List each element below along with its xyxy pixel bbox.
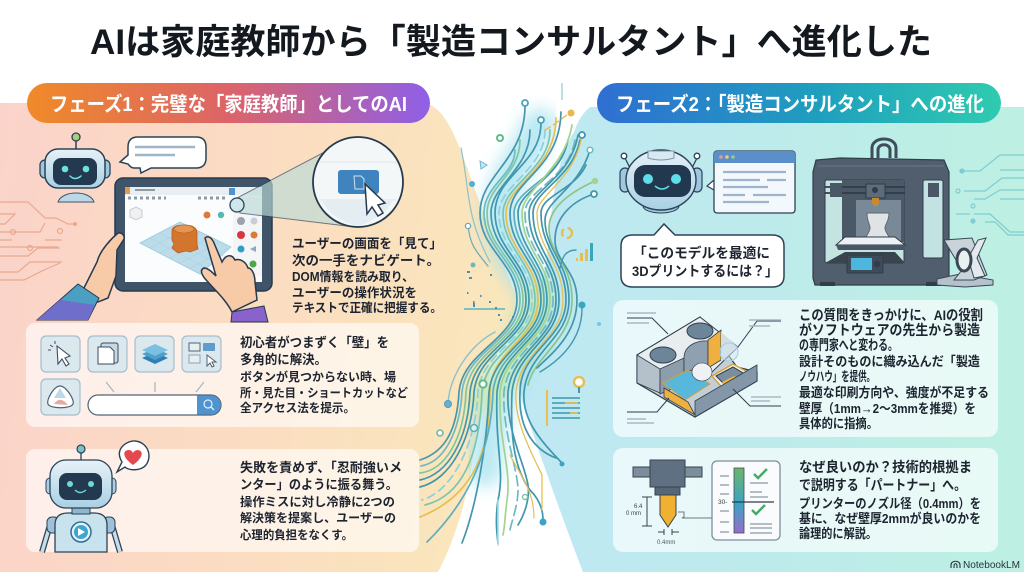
text: mentor: 失敗を責めず、「忍耐強いメ — [240, 460, 402, 475]
text: know-how: 壁厚（1mm→2〜3mmを推奨）を — [799, 401, 976, 416]
text: mentor: 解決策を提案し、ユーザーの — [240, 510, 396, 525]
icon: layers tile — [135, 336, 174, 372]
chart: wall thickness scale: 30- — [718, 499, 727, 506]
illustration: cutaway part — [627, 313, 781, 423]
panel: patient mentor — [26, 441, 419, 552]
text: partner: なぜ良いのか？技術的根拠ま — [799, 459, 972, 475]
text: see the user's screen: DOM情報を読み取り、 — [292, 269, 414, 284]
heading: phase 2 — [597, 83, 1001, 123]
central flowing data streams — [420, 106, 595, 545]
text: know-how: がソフトウェアの先生から製造 — [799, 322, 980, 338]
text: know-how: 具体的に指摘。 — [799, 416, 878, 431]
illustration: nozzle diagram: 6.4 — [634, 504, 643, 510]
title: AIは家庭教師から「製造コンサルタント」へ進化した — [90, 23, 932, 62]
chart: wall thickness scale — [712, 461, 780, 540]
icon: robot with speech bubble (phase 1) — [40, 133, 206, 202]
illustration: tablet with hands — [37, 178, 272, 322]
text: wall solving: 全アクセス法を提示。 — [240, 400, 355, 415]
text: know-how: の専門家へと変わる。 — [799, 337, 898, 353]
text: wall solving: 所・見た目・ショートカットなど — [240, 385, 408, 400]
text: wall solving — [240, 335, 408, 415]
icon: shape tile — [41, 379, 80, 415]
illustration: nozzle diagram — [626, 460, 712, 546]
illustration: nozzle diagram: 0 mm — [626, 511, 641, 517]
panel: wall solving — [26, 323, 419, 427]
right hand — [201, 237, 257, 312]
icon: click tile — [41, 336, 80, 372]
text: partner: 基に、なぜ壁厚2mmが良いのかを — [799, 511, 981, 526]
icon: heart bubble — [117, 441, 149, 472]
text: wall solving: 多角的に解決。 — [240, 352, 327, 367]
panel: technical partner — [613, 448, 998, 552]
icon: layout tile — [182, 336, 221, 372]
heading: phase 1 — [27, 83, 430, 123]
illustration: 3D printer — [813, 139, 949, 286]
illustration: printed part — [937, 238, 993, 287]
text: partner: 論理的に解説。 — [799, 526, 877, 541]
callout: question: 「このモデルを最適に — [633, 245, 770, 261]
callout: question: 3Dプリントするには？」 — [632, 263, 778, 279]
search bar — [88, 382, 221, 415]
text: wall solving: ボタンが見つからない時、場 — [240, 369, 396, 384]
heading: phase 1: フェーズ1：完璧な「家庭教師」としてのAI — [50, 92, 407, 116]
decorative circuit right — [956, 155, 1024, 235]
text: mentor: 心理的負担をなくす。 — [240, 527, 353, 542]
text: see the user's screen: 次の一手をナビゲート。 — [292, 253, 440, 268]
text: see the user's screen: ユーザーの画面を「見て」 — [292, 236, 442, 251]
panel: phase 1 background — [0, 103, 516, 572]
left hand — [80, 233, 124, 302]
callout: question — [621, 224, 784, 287]
text: know-how: 設計そのものに織み込んだ「製造 — [799, 354, 980, 369]
panel: phase 2 background — [518, 107, 1024, 572]
text: know-how — [799, 307, 989, 431]
illustration: magnifier callout — [230, 137, 403, 227]
text: partner: で説明する「パートナー」へ。 — [799, 477, 966, 493]
logo: NotebookLM: NotebookLM — [963, 559, 1020, 571]
text: see the user's screen: テキストで正確に把握する。 — [292, 300, 442, 315]
text: know-how: この質問をきっかけに、AIの役割 — [799, 307, 983, 323]
heading: phase 2: フェーズ2：「製造コンサルタント」への進化 — [616, 92, 984, 116]
text: know-how: ノウハウ」を提供。 — [799, 369, 875, 384]
text: mentor: 操作ミスに対し冷静に2つの — [240, 494, 395, 509]
text: mentor: ンター」のように振る舞う。 — [240, 477, 398, 492]
orange 3D model — [172, 225, 198, 253]
icon: robot with window (phase 2) — [620, 150, 795, 213]
panel: manufacturing know-how — [613, 300, 998, 437]
text: see the user's screen: ユーザーの操作状況を — [292, 285, 417, 300]
text: see the user's screen — [292, 236, 442, 315]
text: partner — [799, 459, 981, 541]
text: know-how: 最適な印刷方向や、強度が不足する — [799, 385, 989, 400]
illustration: nozzle diagram: 0.4mm — [657, 540, 675, 546]
text: wall solving: 初心者がつまずく「壁」を — [240, 335, 389, 350]
icon: copy tile — [88, 336, 127, 372]
text: partner: プリンターのノズル径（0.4mm）を — [799, 496, 981, 511]
text: mentor — [240, 460, 402, 542]
icon: mentor robot — [42, 445, 120, 552]
central stream nodes — [437, 83, 601, 526]
decorative circuit left — [0, 202, 76, 280]
